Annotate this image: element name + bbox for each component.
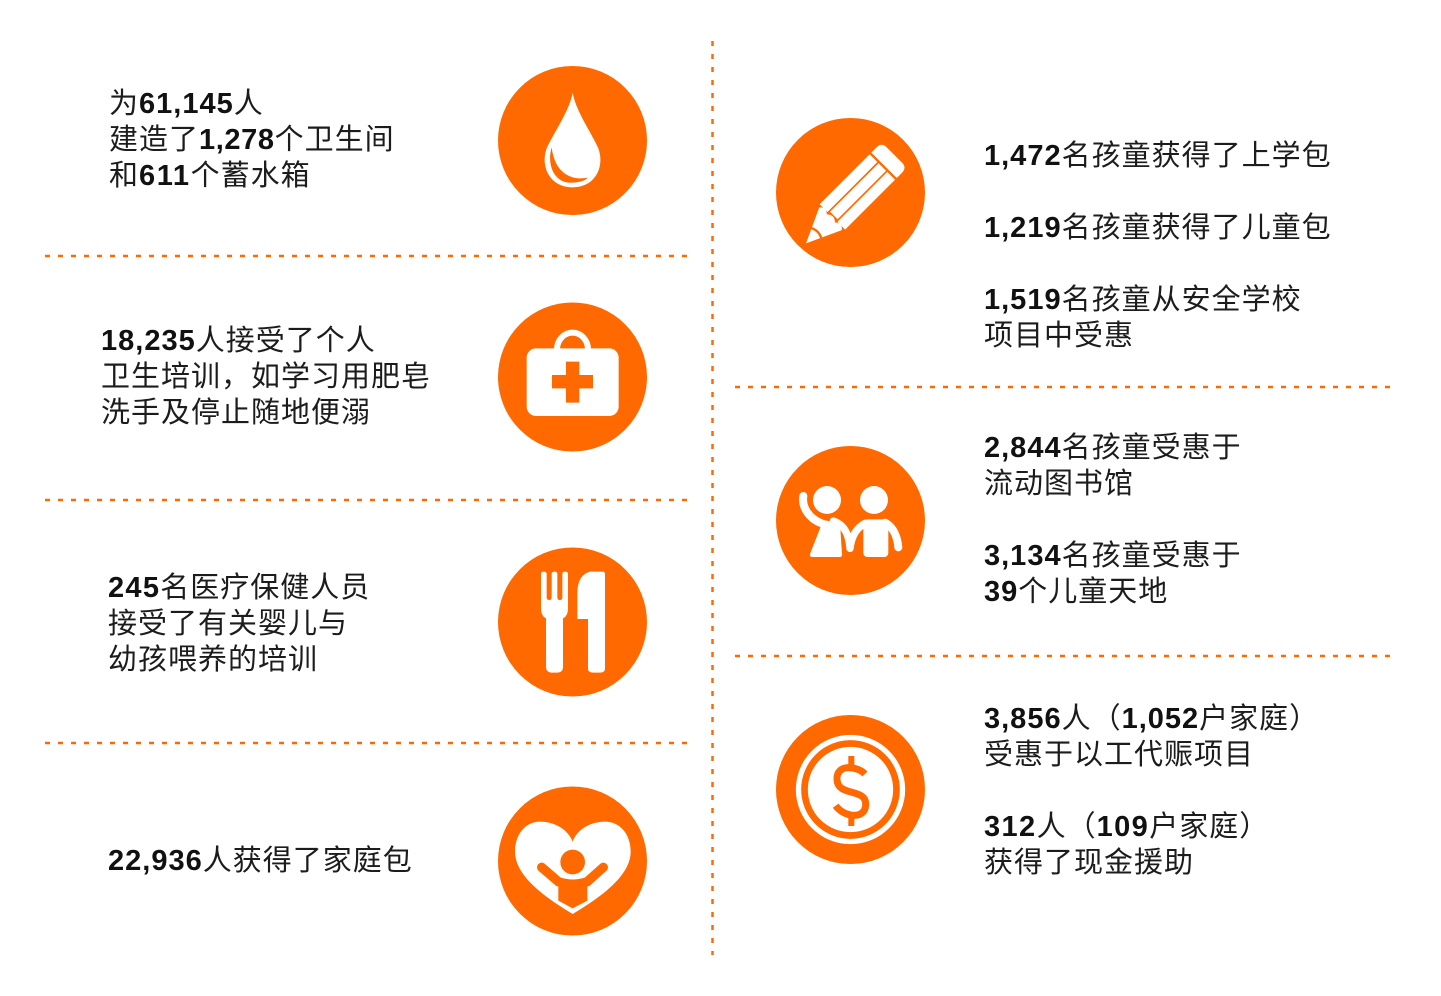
text: cash for work: 受惠于以工代赈项目 xyxy=(984,739,1254,771)
text: family kits: 22,936人获得了家庭包 xyxy=(108,845,413,877)
text: mobile library: 流动图书馆 xyxy=(984,468,1134,500)
icon: two children xyxy=(776,446,925,595)
text: water and sanitation xyxy=(109,88,395,192)
text: infant feeding training xyxy=(108,572,370,676)
icon: pencil xyxy=(776,118,925,267)
icon: dollar coin xyxy=(776,715,925,864)
text: hygiene training: 洗手及停止随地便溺 xyxy=(101,397,371,429)
text: children kits: 1,219名孩童获得了儿童包 xyxy=(984,212,1332,244)
icon: fork and knife xyxy=(498,547,647,696)
text: hygiene training: 卫生培训，如学习用肥皂 xyxy=(101,361,431,393)
text: cash for work xyxy=(984,703,1319,771)
text: water and sanitation: 和611个蓄水箱 xyxy=(109,160,311,192)
text: school bags: 1,472名孩童获得了上学包 xyxy=(984,140,1332,172)
icon: heart with child xyxy=(498,786,647,935)
text: child friendly spaces: 39个儿童天地 xyxy=(984,576,1168,608)
text: safe school project xyxy=(984,284,1302,352)
text: mobile library xyxy=(984,432,1242,500)
text: hygiene training xyxy=(101,325,431,429)
text: child friendly spaces: 3,134名孩童受惠于 xyxy=(984,540,1242,572)
icon: first aid kit xyxy=(498,302,647,451)
text: cash for work: 3,856人（1,052户家庭） xyxy=(984,703,1319,735)
text: safe school project: 项目中受惠 xyxy=(984,320,1134,352)
text: cash assistance: 312人（109户家庭） xyxy=(984,811,1269,843)
text: infant feeding training: 接受了有关婴儿与 xyxy=(108,608,348,640)
icon: water drop xyxy=(498,66,647,215)
text: cash assistance: 获得了现金援助 xyxy=(984,847,1194,879)
text: water and sanitation: 建造了1,278个卫生间 xyxy=(109,124,395,156)
text: hygiene training: 18,235人接受了个人 xyxy=(101,325,376,357)
text: cash assistance xyxy=(984,811,1269,879)
text: mobile library: 2,844名孩童受惠于 xyxy=(984,432,1242,464)
text: infant feeding training: 幼孩喂养的培训 xyxy=(108,644,318,676)
text: water and sanitation: 为61,145人 xyxy=(109,88,264,120)
text: child friendly spaces xyxy=(984,540,1242,608)
text: infant feeding training: 245名医疗保健人员 xyxy=(108,572,370,604)
text: safe school project: 1,519名孩童从安全学校 xyxy=(984,284,1302,316)
